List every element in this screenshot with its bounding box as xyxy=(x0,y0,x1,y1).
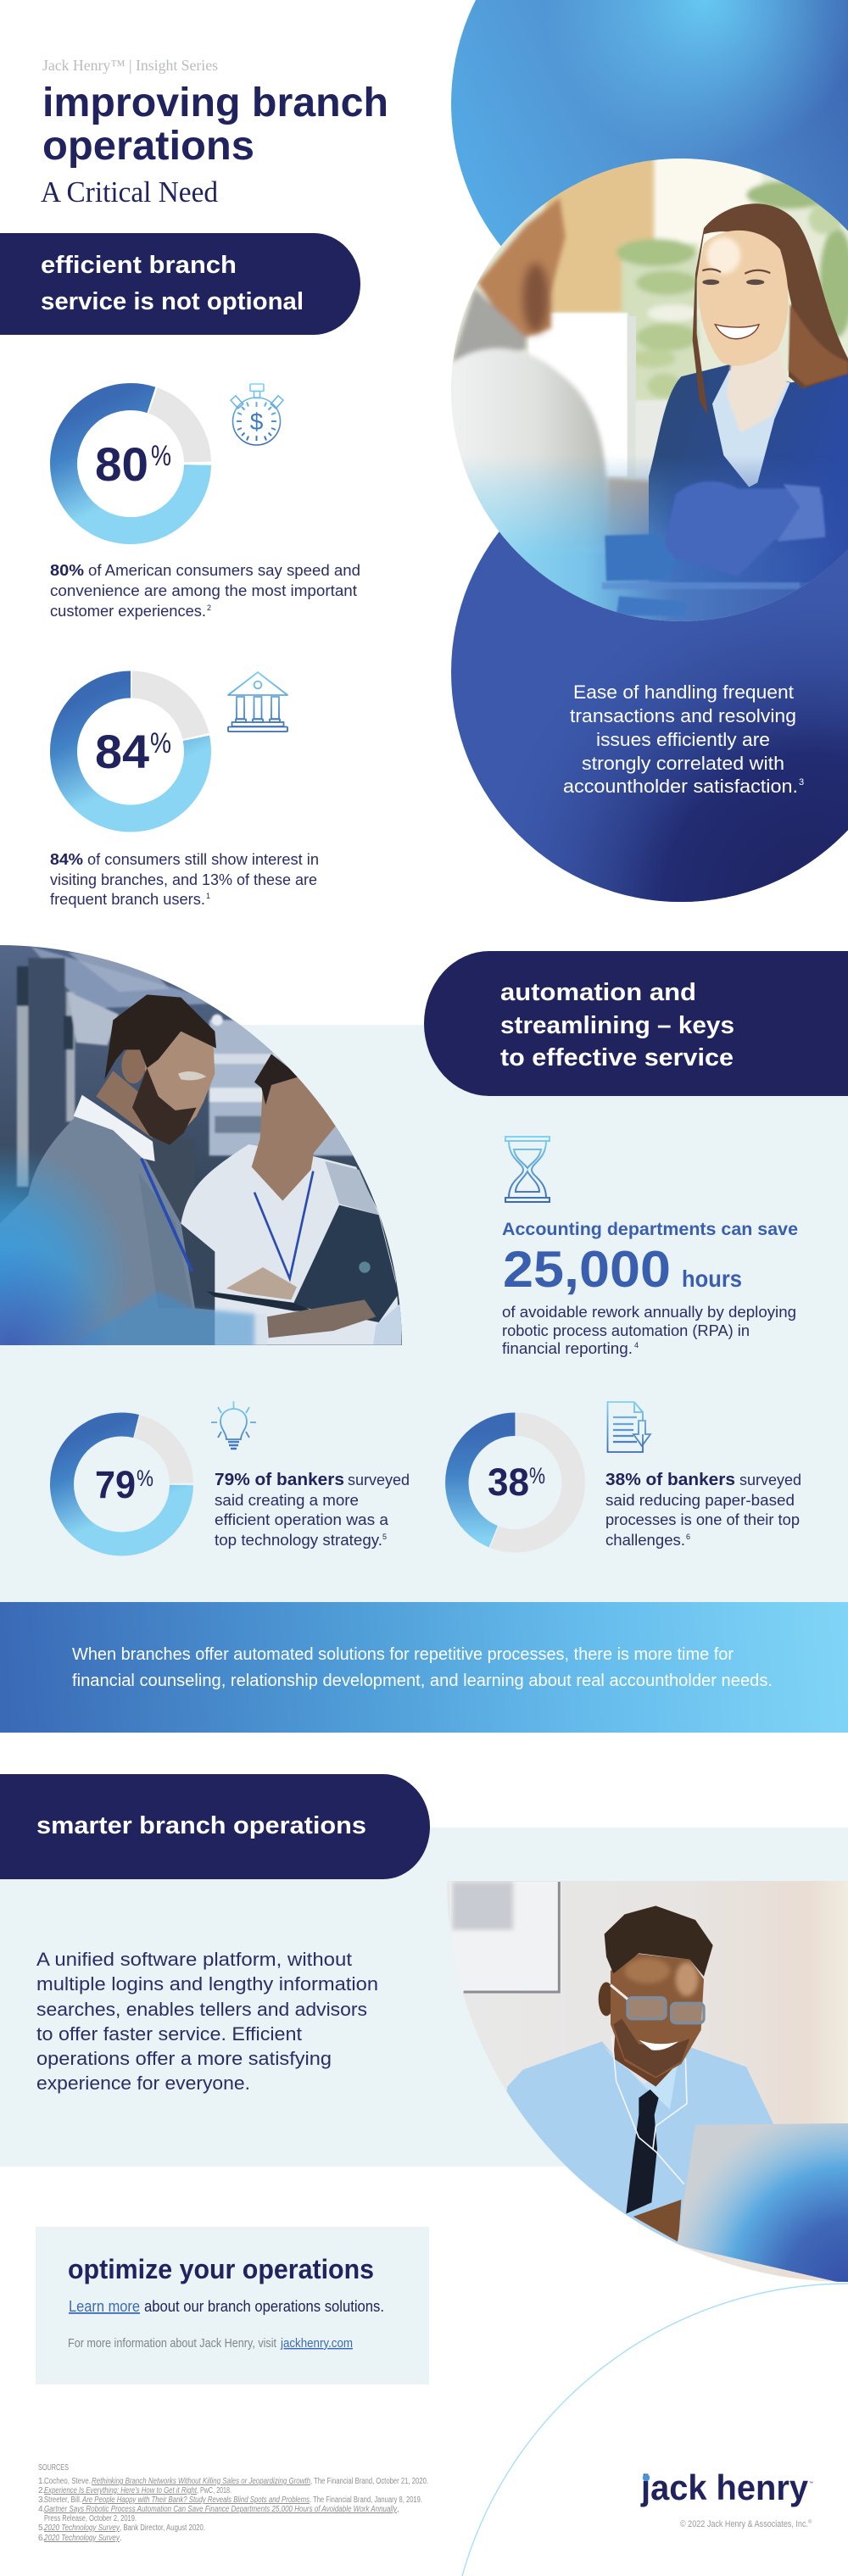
donut chart: 80%: 80 xyxy=(95,437,148,491)
text: 79% of bankers: efficient operation was a xyxy=(215,1511,389,1528)
icon: document with arrow xyxy=(607,1402,650,1452)
text: avoidable rework: of avoidable rework annually by deploying xyxy=(502,1304,796,1321)
sources: 3. xyxy=(38,2495,45,2505)
text: 84% of consumers: 1 xyxy=(206,892,210,900)
stat: 25,000 hours: hours xyxy=(682,1266,742,1292)
donut chart: 84%: % xyxy=(150,727,171,759)
callout: ease of handling: 3 xyxy=(799,777,804,787)
donut chart: 38%: 38 xyxy=(488,1460,529,1504)
section banner: automation and streamlining: automation and xyxy=(500,979,696,1006)
panel: smarter branch background xyxy=(0,1828,848,2167)
text: 80% of American consumers: customer experiences. xyxy=(50,603,206,620)
icon: hourglass xyxy=(505,1137,550,1202)
sources: Experience Is Everything: Here’s How to Get it Right xyxy=(44,2486,198,2495)
section banner: automation and streamlining: streamlining – keys xyxy=(500,1012,734,1039)
sources: , xyxy=(397,2505,399,2514)
callout: ease of handling xyxy=(563,682,804,797)
sources: Press Release, October 2, 2019. xyxy=(44,2514,137,2523)
more information line: For more information about Jack Henry, visit xyxy=(68,2337,276,2351)
photo: smiling man at laptop xyxy=(441,1878,848,2284)
text: 79% of bankers: 79% of bankers xyxy=(215,1471,344,1489)
more information line: jackhenry.com xyxy=(280,2337,353,2351)
donut chart: 79% xyxy=(62,1424,181,1544)
text: 84% of consumers xyxy=(50,851,319,908)
sources: , PwC, 2018. xyxy=(197,2486,232,2495)
text: 79% of bankers xyxy=(215,1471,410,1549)
heading: optimize your operations xyxy=(68,2254,374,2284)
subtitle: A Critical Need xyxy=(41,175,218,209)
text: 80% of American consumers: of American consumers say speed and xyxy=(88,562,360,579)
section banner: smarter branch operations xyxy=(0,1774,430,1879)
sources: 6. xyxy=(38,2534,45,2543)
sources: 2. xyxy=(38,2486,45,2495)
donut chart: 79%: % xyxy=(137,1466,153,1491)
text: unified software platform: to offer faster service. Efficient xyxy=(36,2023,302,2045)
callout band: automated solutions xyxy=(0,1602,848,1733)
sources: Cocheo, Steve. xyxy=(44,2477,91,2486)
text: 38% of bankers: 6 xyxy=(686,1533,690,1541)
text: 38% of bankers: 38% of bankers xyxy=(605,1471,735,1489)
section banner: efficient branch service xyxy=(0,233,360,335)
text: 79% of bankers: said creating a more xyxy=(215,1492,359,1509)
icon: stopwatch with dollar sign: $ xyxy=(250,409,264,435)
stat: 25,000 hours: 25,000 xyxy=(503,1241,671,1298)
sources: Gartner Says Robotic Process Automation Can Save Finance Departments 25,000 Hours of Avoidable Work Annually xyxy=(44,2505,398,2514)
sources: SOURCES xyxy=(38,2463,69,2473)
panel: optimize your operations xyxy=(36,2227,429,2384)
title xyxy=(42,81,388,169)
sources: Rethinking Branch Networks Without Killing Sales or Jeopardizing Growth xyxy=(92,2477,310,2486)
section banner: smarter branch operations: smarter branch operations xyxy=(36,1812,366,1839)
section banner: automation and streamlining: to effective service xyxy=(500,1044,734,1071)
sources: . xyxy=(120,2534,122,2543)
callout: ease of handling: Ease of handling frequent xyxy=(573,682,794,703)
text: 80% of American consumers xyxy=(50,562,360,620)
donut chart: 84% xyxy=(64,685,198,819)
text: avoidable rework: 4 xyxy=(634,1341,639,1349)
icon: light bulb xyxy=(211,1401,256,1449)
sources: 5. xyxy=(38,2523,45,2533)
text: 80% of American consumers: convenience are among the most important xyxy=(50,582,357,599)
text: 84% of consumers: visiting branches, and 13% of these are xyxy=(50,871,317,888)
logo: jack henry: jack henry xyxy=(640,2468,809,2507)
donut chart: 38% xyxy=(457,1424,573,1541)
callout: ease of handling: accountholder satisfaction. xyxy=(563,776,798,797)
text: 38% of bankers: processes is one of their top xyxy=(605,1511,800,1528)
callout: ease of handling: strongly correlated with xyxy=(582,753,784,774)
header xyxy=(41,57,388,209)
sources: 4. xyxy=(38,2505,45,2514)
sources: 1. xyxy=(38,2477,45,2486)
text: 84% of consumers: 84% xyxy=(50,851,83,868)
callout band: automated solutions: financial counseling, relationship development, and learning about real accountholder needs. xyxy=(72,1672,773,1690)
text: 79% of bankers: top technology strategy. xyxy=(215,1532,382,1549)
text: avoidable rework: financial reporting. xyxy=(502,1340,633,1357)
text: unified software platform: A unified software platform, without xyxy=(36,1949,352,1970)
icon: stopwatch with dollar sign xyxy=(231,384,283,445)
learn more line: Learn more xyxy=(69,2298,140,2315)
sources: . The Financial Brand, January 8, 2019. xyxy=(310,2495,422,2505)
text: avoidable rework xyxy=(502,1304,796,1357)
donut chart: 80% xyxy=(64,397,198,531)
stat: 25,000 hours: Accounting departments can save xyxy=(502,1220,798,1239)
donut chart: 38%: % xyxy=(529,1463,545,1488)
blue circle: lower right xyxy=(451,442,848,902)
photo: two people shaking hands xyxy=(441,153,848,627)
sources: Streeter, Bill. xyxy=(44,2495,81,2505)
section banner: efficient branch service: efficient branch xyxy=(41,252,237,279)
decorative outline arc xyxy=(462,2284,848,2576)
photo: two technicians with laptop xyxy=(0,941,407,1348)
sources xyxy=(38,2463,428,2543)
copyright: © 2022 Jack Henry & Associates, Inc. xyxy=(680,2519,808,2529)
series label: Jack Henry™ | Insight Series xyxy=(42,57,218,74)
logo: jack henry: ™ xyxy=(809,2481,813,2486)
copyright: ® xyxy=(808,2519,812,2525)
text: 80% of American consumers: 80% xyxy=(50,562,84,579)
text: 80% of American consumers: 2 xyxy=(207,604,211,612)
text: 79% of bankers: 5 xyxy=(382,1533,387,1541)
sources: Are People Happy with Their Bank? Study Reveals Blind Spots and Problems xyxy=(81,2495,310,2505)
text: 38% of bankers: challenges. xyxy=(605,1532,685,1549)
text: unified software platform: operations offer a more satisfying xyxy=(36,2048,332,2069)
text: 84% of consumers: of consumers still show interest in xyxy=(87,851,319,868)
learn more line: about our branch operations solutions. xyxy=(144,2298,384,2315)
text: unified software platform: experience for everyone. xyxy=(36,2072,250,2094)
sources: , Bank Director, August 2020. xyxy=(120,2523,205,2533)
callout: ease of handling: issues efficiently are xyxy=(596,729,770,750)
donut chart: 79%: 79 xyxy=(95,1463,136,1506)
sources: 2020 Technology Survey xyxy=(43,2523,120,2533)
text: 79% of bankers: surveyed xyxy=(348,1472,410,1488)
text: 84% of consumers: frequent branch users. xyxy=(50,891,205,908)
text: 38% of bankers xyxy=(605,1471,801,1549)
stat: 25,000 hours xyxy=(502,1220,798,1298)
donut chart: 80%: % xyxy=(151,440,171,472)
title: operations xyxy=(42,124,254,169)
callout: ease of handling: transactions and resolving xyxy=(570,705,796,726)
text: 38% of bankers: surveyed xyxy=(739,1472,801,1488)
text: unified software platform: multiple logins and lengthy information xyxy=(36,1973,378,1995)
blue circle: top right xyxy=(451,0,848,333)
section banner: efficient branch service: service is not optional xyxy=(41,288,304,315)
section banner: automation and streamlining xyxy=(424,951,848,1096)
callout band: automated solutions: When branches offer automated solutions for repetitive processes, there is more time for xyxy=(72,1645,734,1664)
donut chart: 84%: 84 xyxy=(95,725,149,778)
text: 38% of bankers: said reducing paper-based xyxy=(605,1492,795,1509)
sources: 2020 Technology Survey xyxy=(43,2534,120,2543)
text: unified software platform: searches, enables tellers and advisors xyxy=(36,1999,367,2020)
text: avoidable rework: robotic process automation (RPA) in xyxy=(502,1322,750,1339)
title: improving branch xyxy=(42,81,388,125)
sources: , The Financial Brand, October 21, 2020. xyxy=(310,2477,428,2486)
text: unified software platform xyxy=(36,1949,378,2094)
icon: bank building xyxy=(228,672,287,732)
panel: automation background xyxy=(0,1025,848,1602)
